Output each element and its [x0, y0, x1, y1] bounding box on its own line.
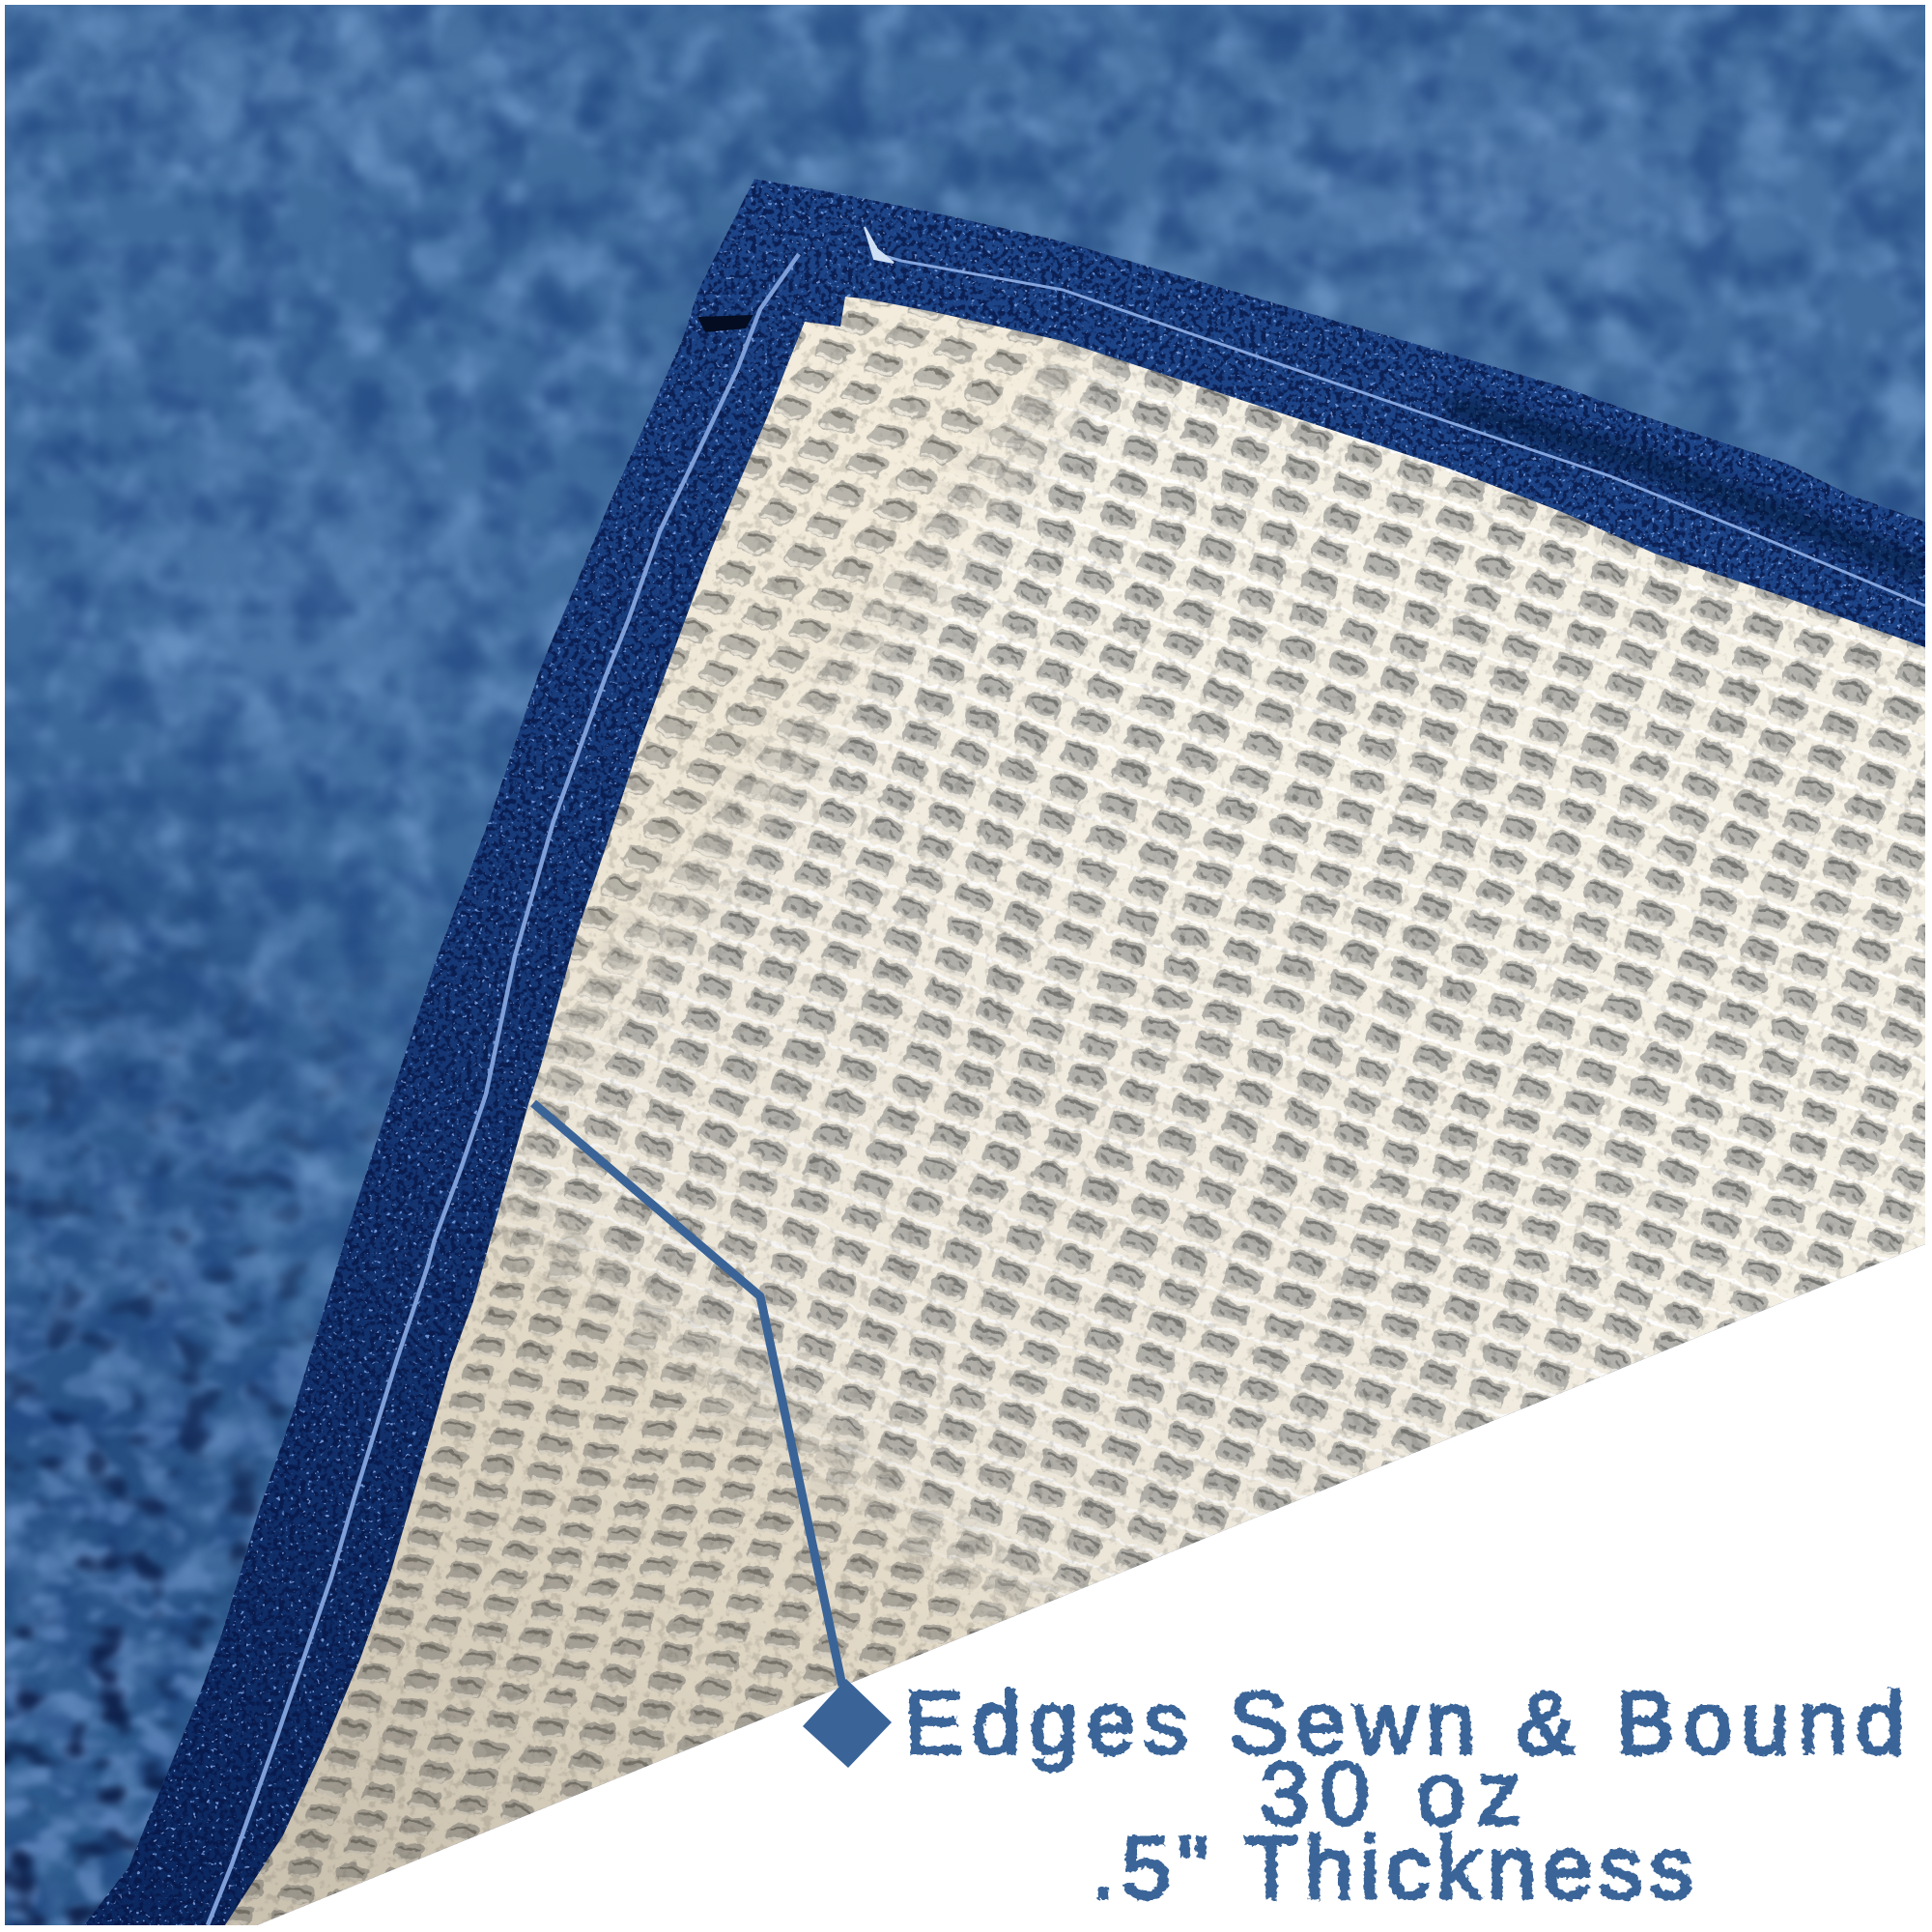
woven backing mesh: [225, 297, 1925, 1925]
callout leader line: [533, 1103, 842, 1686]
stitch line on top binding: [874, 253, 1925, 606]
callout line: edges: Edges Sewn & Bound: [904, 1674, 1905, 1773]
stitch line on left binding: [208, 254, 799, 1925]
callout line: thickness: .5" Thickness: [1091, 1819, 1693, 1918]
callout line: weight: 30 oz: [1260, 1745, 1521, 1843]
callout text: [904, 1674, 1905, 1918]
shadow band on top binding: [1449, 404, 1925, 570]
corner fold shadow: [697, 315, 753, 332]
callout diamond marker: [803, 1679, 892, 1768]
loose thread at corner: [865, 227, 894, 263]
